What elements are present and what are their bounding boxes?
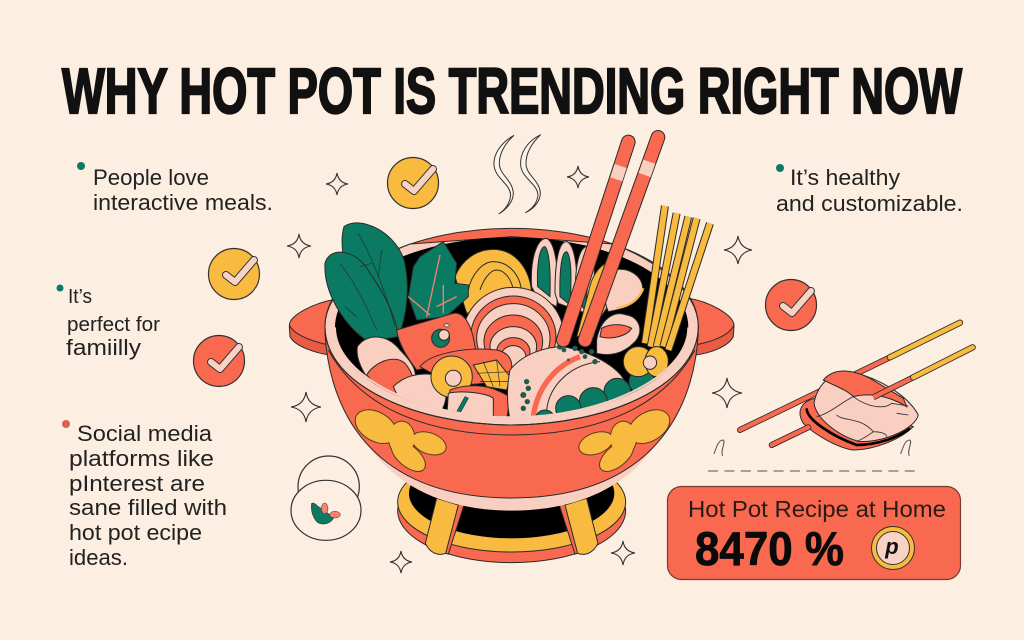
dashed divider <box>708 470 915 472</box>
icon: red check right <box>766 280 816 330</box>
icon: red check left <box>194 336 244 386</box>
meat slice <box>814 372 918 442</box>
text block: perfect for family <box>56 284 160 360</box>
stand <box>398 448 626 563</box>
stat value: 8470 % <box>695 522 844 575</box>
text block: social media: sane filled with <box>69 495 227 520</box>
pink mushrooms left <box>357 337 415 397</box>
flower decoration right <box>576 404 675 477</box>
pot handles and underside <box>289 298 734 511</box>
infographic canvas <box>56 66 976 580</box>
text block: social media: ideas. <box>69 545 128 570</box>
chopsticks in pot <box>563 137 658 340</box>
text block: social media: pInterest are <box>69 471 205 496</box>
text block: interactive meals <box>77 162 273 215</box>
text block: interactive meals: People love <box>93 165 209 190</box>
front rim line <box>325 327 698 425</box>
red tofu cube <box>397 313 477 370</box>
green and pink loops <box>531 238 594 317</box>
leafy green with pink veins <box>408 242 468 320</box>
icon: steam <box>494 135 541 214</box>
text block: healthy and customizable: and customizable. <box>776 191 963 216</box>
text block: social media <box>62 420 227 570</box>
icon: pinterest badge: p <box>884 534 899 559</box>
text block: perfect for family: It’s <box>68 285 92 308</box>
text block: social media: hot pot ecipe <box>69 520 202 545</box>
meat base <box>800 398 913 450</box>
near chopstick <box>772 347 973 445</box>
green broccoli <box>536 373 654 416</box>
corn and egg <box>420 349 512 385</box>
sparkles <box>287 166 752 573</box>
card label: Hot Pot Recipe at Home <box>688 496 946 522</box>
pink cube <box>449 385 508 416</box>
stat card <box>668 486 960 580</box>
text block: social media: platforms like <box>69 446 214 471</box>
yellow arcs <box>455 249 532 313</box>
illustration: chopsticks holding meat <box>714 323 973 456</box>
egg right <box>623 347 653 377</box>
icon: pinterest badge <box>872 526 914 570</box>
text block: healthy and customizable <box>776 164 963 216</box>
text block: perfect for family: famiilly <box>66 335 142 360</box>
flower decoration left <box>350 404 449 477</box>
far chopstick <box>740 323 960 430</box>
food <box>325 206 710 430</box>
icon: yellow check left <box>208 248 260 300</box>
text block: social media: Social media <box>77 421 212 446</box>
mushroom and yellow pepper <box>577 262 643 355</box>
pot body <box>325 333 698 498</box>
food cluster clipped to pot <box>356 336 669 416</box>
text block: healthy and customizable: It’s healthy <box>790 165 901 190</box>
text block: interactive meals: interactive meals. <box>93 190 273 215</box>
striped pink noodle swirl <box>463 287 564 386</box>
icon: yellow check top <box>388 158 438 208</box>
herbs <box>520 344 598 411</box>
pot rim and interior <box>325 228 698 425</box>
noodles <box>645 206 710 350</box>
spinach leaves <box>325 223 407 342</box>
large fish slice <box>507 347 627 420</box>
steam squiggles <box>714 440 911 456</box>
icon: small side plate <box>291 456 361 540</box>
text block: perfect for family: perfect for <box>67 313 160 336</box>
hot pot <box>289 137 734 563</box>
